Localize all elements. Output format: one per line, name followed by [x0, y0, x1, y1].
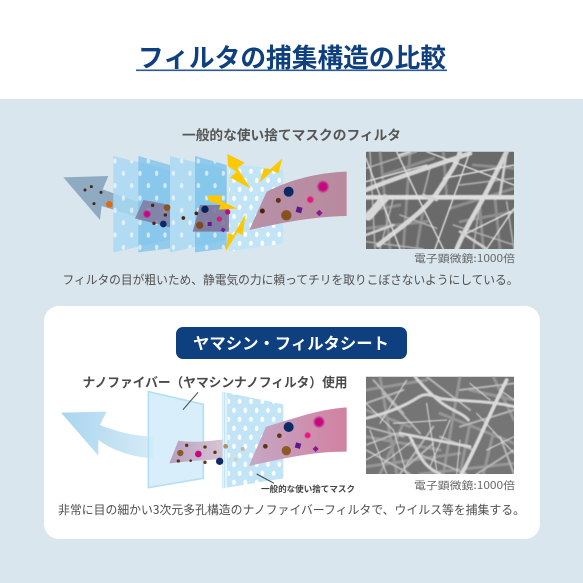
panel: Yamashin filter sheet: [44, 306, 540, 539]
nano mesh filter: [148, 392, 203, 488]
leader line: nano filter: [183, 392, 198, 410]
photo: nanofiber micrograph: [366, 377, 514, 474]
caption: standard microscope: 電子顕微鏡:1000倍: [414, 251, 516, 266]
filter layers: [113, 156, 227, 252]
caption: nanofiber microscope: 電子顕微鏡:1000倍: [414, 478, 516, 493]
particles: [177, 416, 325, 465]
description: nanofiber filter: 非常に目の細かい3次元多孔構造のナノファイバーフィルタで、ウイルス等を捕集する。: [58, 501, 525, 518]
heading: nanofiber: ナノファイバー（ヤマシンナノフィルタ）使用: [82, 372, 348, 391]
title: フィルタの捕集構造の比較: [138, 38, 446, 75]
front filter layer: [229, 163, 283, 252]
leader line: standard mask: [257, 474, 274, 483]
arrow: outgoing air: [63, 176, 147, 220]
incoming particles stream: [249, 172, 347, 230]
icon: lightning bolts: [207, 154, 282, 252]
stream segments: [135, 200, 229, 232]
incoming particles stream: [249, 407, 347, 466]
diagram: standard mask filter: [63, 154, 347, 252]
arrow: clean air: [61, 412, 153, 458]
stream after filter: [169, 438, 232, 463]
photo: standard mask micrograph: [366, 152, 514, 249]
description: standard filter: フィルタの目が粗いため、静電気の力に頼ってチリを取りこぼさないようにしている。: [62, 271, 518, 288]
badge: Yamashin filter sheet: [176, 327, 407, 359]
heading: standard mask: 一般的な使い捨てマスクのフィルタ: [182, 124, 401, 144]
badge: Yamashin filter sheet: ヤマシン・フィルタシート: [193, 330, 389, 354]
particles: [83, 180, 330, 232]
label: standard mask: 一般的な使い捨てマスク: [261, 483, 355, 495]
diagram: nanofiber filter: [61, 392, 347, 488]
standard mask filter: [222, 392, 283, 488]
